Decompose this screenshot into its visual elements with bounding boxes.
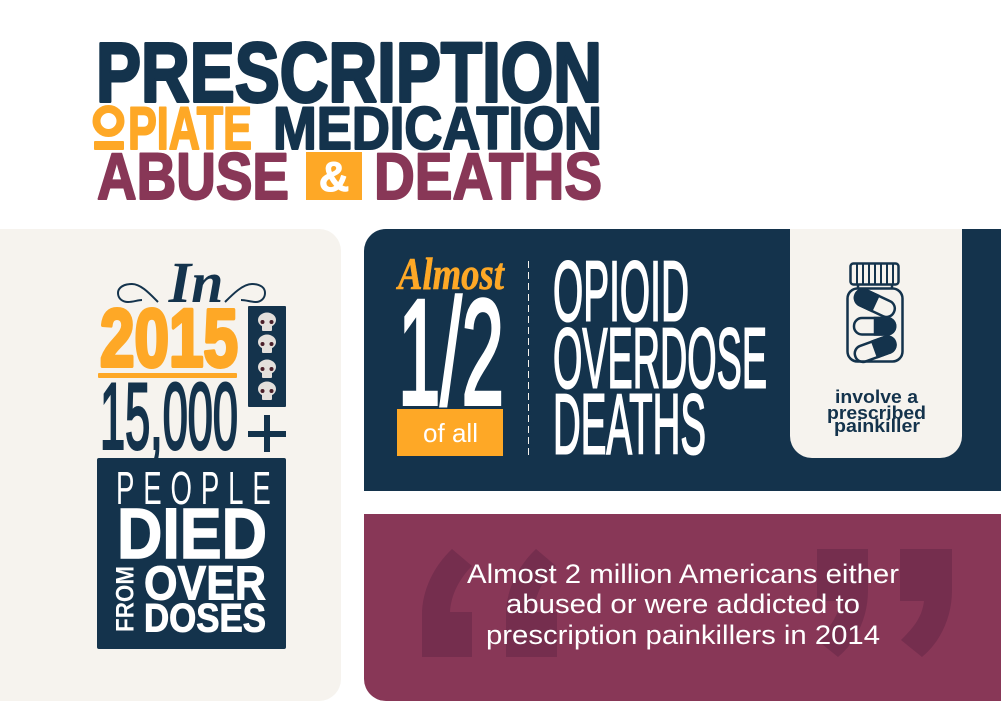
text: people: PEOPLE xyxy=(116,464,271,515)
text: involve a prescribed painkiller: involve a xyxy=(835,387,919,407)
fraction 1/2: 1/2 xyxy=(398,268,504,436)
panel: 2015 deaths: 15,000 xyxy=(100,364,238,468)
skull strip xyxy=(248,306,286,407)
flourish: left xyxy=(118,284,158,302)
plus sign xyxy=(248,415,286,452)
title word: opiate xyxy=(94,95,252,162)
card: prescribed painkiller xyxy=(790,229,962,458)
text: involve a prescribed painkiller xyxy=(827,387,926,436)
text: doses: DOSES xyxy=(144,596,266,640)
text: involve a prescribed painkiller: prescribed xyxy=(827,403,926,423)
icon: opening quote mark xyxy=(422,549,557,657)
title xyxy=(94,26,602,213)
text: died: DIED xyxy=(117,495,267,574)
icon: pill bottle xyxy=(848,264,902,364)
title line: prescription: PRESCRIPTION xyxy=(96,26,602,120)
quote text: abused or were addicted to xyxy=(506,589,860,619)
title word: deaths: DEATHS xyxy=(374,139,602,213)
script: almost: Almost xyxy=(396,248,505,299)
text: over: OVER xyxy=(144,558,266,610)
panel: 2015 deaths xyxy=(0,229,341,701)
panel: half of overdose deaths xyxy=(364,229,1001,491)
flourish: right xyxy=(225,284,265,302)
quote text: Almost 2 million Americans either xyxy=(467,559,899,589)
panel: two million americans quote xyxy=(364,514,1001,701)
title word: opiate: PIATE xyxy=(128,95,252,162)
text: involve a prescribed painkiller: painkiller xyxy=(834,416,920,436)
panel: half of overdose deaths: OPIOID xyxy=(553,244,689,340)
title word: medication: MEDICATION xyxy=(273,95,602,162)
text: from: FROM xyxy=(112,566,140,632)
dashed divider xyxy=(528,261,530,456)
year underline xyxy=(98,373,237,378)
panel: half of overdose deaths: DEATHS xyxy=(553,378,706,472)
title word: abuse: ABUSE xyxy=(97,139,289,213)
orange box: of all: of all xyxy=(423,418,478,448)
icon: closing quote mark xyxy=(817,549,952,657)
orange box: of all xyxy=(397,409,503,456)
title ampersand box: & xyxy=(319,153,349,200)
quote text: prescription painkillers in 2014 xyxy=(486,620,880,650)
heading: in: In xyxy=(168,250,223,315)
quote text xyxy=(467,559,899,650)
title ampersand box xyxy=(306,152,362,200)
navy box: people died xyxy=(97,458,286,649)
year 2015: 2015 xyxy=(100,293,238,384)
